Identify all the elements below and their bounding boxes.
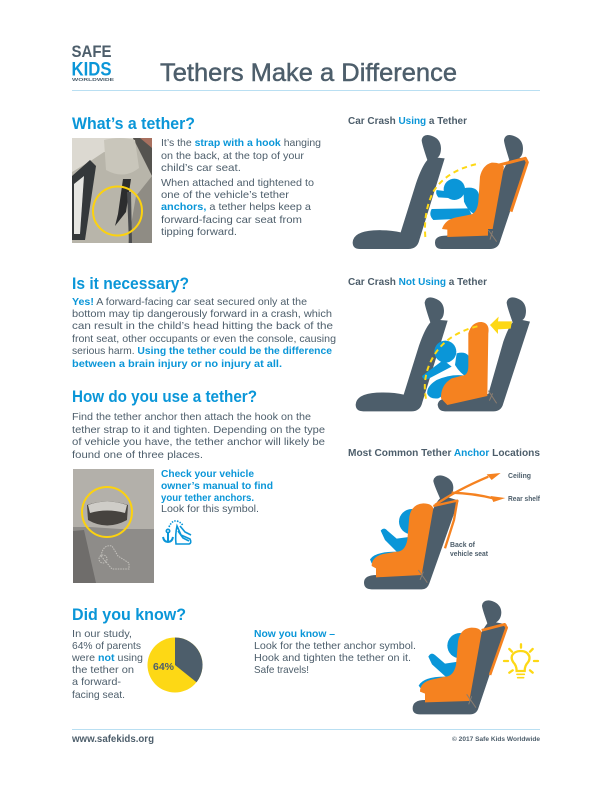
text: study statistic: [71, 629, 143, 701]
text: study statistic: the tether on: [72, 665, 134, 676]
photo: tether strap on seat back: [72, 138, 152, 243]
text: now you know: Now you know –: [254, 629, 335, 640]
child: [370, 509, 424, 564]
text: check vehicle manual: owner’s manual to find: [161, 481, 273, 492]
lower hook: [488, 230, 497, 242]
heading: is it necessary: Is it necessary?: [72, 274, 189, 293]
vehicle seat: [364, 475, 459, 589]
text: study statistic: were not using: [71, 653, 143, 664]
heading: car crash not using a tether: Car Crash Not Using a Tether: [348, 277, 487, 288]
text: check vehicle manual: [161, 469, 273, 515]
pie chart: 64%: 64%: [153, 661, 175, 673]
text: study statistic: facing seat.: [72, 690, 125, 701]
text: necessity explanation: can result in the child’s head hitting the back of the: [72, 321, 333, 332]
text: tether description: anchors, a tether helps keep a: [161, 202, 311, 213]
heading: car crash using a tether: Car Crash Using a Tether: [348, 116, 467, 127]
car seat: [372, 503, 433, 577]
child: [430, 179, 479, 220]
text: usage instructions: Find the tether anchor then attach the hook on the: [72, 412, 311, 423]
lower hook: [418, 570, 427, 583]
label: ceiling: Ceiling: [508, 473, 531, 480]
text: check vehicle manual: Look for this symbol.: [161, 504, 259, 515]
unsecured car seat: [441, 322, 489, 405]
text: study statistic: In our study,: [72, 629, 132, 640]
label: back of vehicle seat: Back of: [450, 542, 476, 549]
text: tether description: child’s car seat.: [161, 163, 241, 174]
text: tether description: [161, 138, 321, 238]
text: necessity explanation: serious harm. Using the tether could be the difference: [72, 346, 332, 357]
footer: website: www.safekids.org: [71, 734, 154, 745]
section: how do you use a tether: [72, 387, 325, 583]
text: necessity explanation: front seat, other occupants or even the console, causing: [72, 334, 336, 345]
text: tether description: on the back, at the top of your: [161, 151, 305, 162]
section: did you know: [71, 605, 416, 701]
footer: copyright: © 2017 Safe Kids Worldwide: [452, 735, 540, 743]
text: check vehicle manual: Check your vehicle: [161, 469, 254, 480]
photo: anchor with symbol: [73, 469, 154, 583]
arrow: seat tipping: [490, 317, 512, 334]
text: tether description: It’s the strap with a hook hanging: [161, 138, 321, 149]
icon: tether anchor symbol: [163, 521, 191, 544]
child: [419, 633, 473, 689]
text: usage instructions: found one of three places.: [72, 450, 203, 461]
text: check vehicle manual: your tether anchors.: [161, 493, 254, 504]
logo: Safe Kids Worldwide: SAFE: [72, 42, 112, 61]
lower hook: [467, 694, 476, 708]
text: now you know: Look for the tether anchor symbol.: [254, 641, 416, 652]
label: back of vehicle seat: vehicle seat: [450, 551, 489, 558]
rear vehicle seat: [435, 135, 527, 249]
crash path: [425, 163, 480, 237]
crash path: [425, 326, 480, 399]
illustration: anchor locations: [364, 473, 505, 589]
pie chart: 64%: [148, 637, 203, 692]
illustration: crash with tether: [353, 135, 527, 249]
text: usage instructions: of vehicle you have, the tether anchor will likely be: [72, 437, 325, 448]
text: necessity explanation: [72, 297, 336, 370]
text: tether description: one of the vehicle’s tether: [161, 190, 290, 201]
text: necessity explanation: between a brain injury or no injury at all.: [72, 359, 282, 370]
section: is it necessary: [72, 274, 336, 370]
tether straps: [433, 477, 493, 548]
footer rule: [72, 729, 540, 730]
text: tether description: When attached and tightened to: [161, 178, 314, 189]
heading: how do you use a tether: How do you use a tether?: [72, 387, 257, 406]
logo: Safe Kids Worldwide: WORLDWIDE: [72, 77, 114, 82]
text: tether description: forward-facing car seat from: [161, 215, 302, 226]
heading: did you know: Did you know?: [72, 605, 186, 624]
text: study statistic: 64% of parents: [72, 641, 141, 652]
car seat: [420, 628, 482, 702]
forward-facing car seat: [442, 163, 504, 237]
illustration: crash without tether: [356, 297, 530, 411]
tether strap: [499, 158, 527, 212]
front vehicle seat: [353, 135, 445, 249]
icon: lightbulb: [504, 644, 538, 678]
text: necessity explanation: bottom may tip dangerously forward in a crash, which: [72, 309, 332, 320]
illustration: properly tethered seat: [413, 600, 538, 714]
tether strap: [482, 624, 507, 675]
heading: what's a tether: What’s a tether?: [72, 114, 195, 133]
title: Tethers Make a Difference: [160, 59, 457, 87]
text: now you know: Safe travels!: [254, 665, 309, 676]
text: now you know: Hook and tighten the tether on it.: [254, 653, 411, 664]
child: [422, 341, 471, 398]
logo: Safe Kids Worldwide: KIDS: [72, 60, 112, 80]
vehicle seat: [413, 600, 507, 714]
heading: most common tether anchor locations: Most Common Tether Anchor Locations: [348, 448, 540, 459]
logo: Safe Kids Worldwide: [72, 42, 114, 82]
text: now you know: [254, 629, 416, 676]
text: usage instructions: tether strap to it and tighten. Depending on the type: [72, 425, 325, 436]
rear vehicle seat: [438, 297, 530, 411]
label: back of vehicle seat: [450, 542, 489, 558]
text: study statistic: a forward-: [72, 677, 121, 688]
section: what's a tether: [72, 114, 321, 243]
label: rear shelf: Rear shelf: [508, 496, 541, 503]
header rule: [72, 90, 540, 91]
text: usage instructions: [72, 412, 325, 461]
front vehicle seat: [356, 297, 448, 411]
lower hook: [488, 391, 497, 403]
text: necessity explanation: Yes! A forward-facing car seat secured only at the: [72, 297, 307, 308]
text: tether description: tipping forward.: [161, 227, 237, 238]
